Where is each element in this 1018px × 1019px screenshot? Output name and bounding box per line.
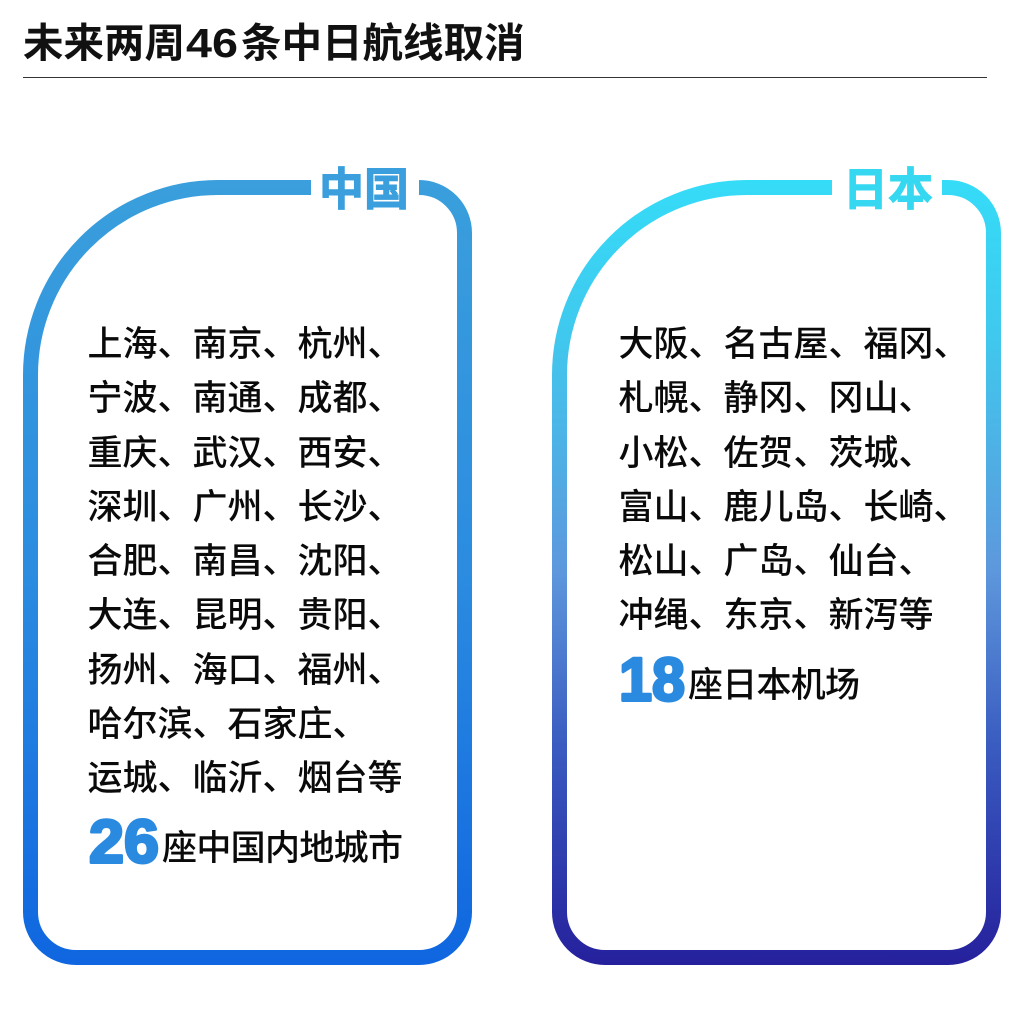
city list: Japan: 富山、鹿儿岛、长崎、: [618, 488, 969, 527]
city list: China: 哈尔滨、石家庄、: [88, 705, 368, 744]
city list: Japan: 冲绳、东京、新泻等: [618, 596, 934, 635]
heading: China: 中国: [319, 164, 409, 215]
panel: Japan: [560, 164, 994, 958]
city list: China: 合肥、南昌、沈阳、: [88, 542, 403, 581]
city list: Japan: 松山、广岛、仙台、: [618, 542, 934, 581]
city list: China: 重庆、武汉、西安、: [88, 434, 403, 473]
statistic: 26 cities: [89, 808, 403, 876]
city list: China: 大连、昆明、贵阳、: [88, 596, 403, 635]
title: 未来两周: [23, 20, 185, 66]
heading: Japan: 日本: [843, 164, 933, 215]
city list: China: 运城、临沂、烟台等: [88, 759, 403, 798]
city list: Japan: 小松、佐贺、茨城、: [618, 434, 934, 473]
city list: China: [88, 325, 403, 798]
city list: China: 上海、南京、杭州、: [88, 325, 403, 364]
panel: China: [30, 164, 465, 958]
city list: China: 深圳、广州、长沙、: [88, 488, 403, 527]
panel border: China: [30, 188, 465, 958]
city list: China: 扬州、海口、福州、: [88, 651, 403, 690]
statistic: 18 airports: [619, 646, 860, 714]
city list: Japan: 大阪、名古屋、福冈、: [618, 325, 969, 364]
title: 46: [186, 20, 238, 66]
city list: Japan: [618, 325, 969, 635]
title: 条中日航线取消: [241, 20, 524, 66]
panel border: Japan: [560, 188, 994, 958]
city list: Japan: 札幌、静冈、冈山、: [618, 379, 934, 418]
statistic: 18 airports: 座日本机场: [688, 666, 860, 705]
statistic: 18 airports: 18: [619, 646, 685, 714]
statistic: 26 cities: 座中国内地城市: [162, 829, 403, 868]
statistic: 26 cities: 26: [89, 808, 159, 876]
city list: China: 宁波、南通、成都、: [88, 379, 403, 418]
